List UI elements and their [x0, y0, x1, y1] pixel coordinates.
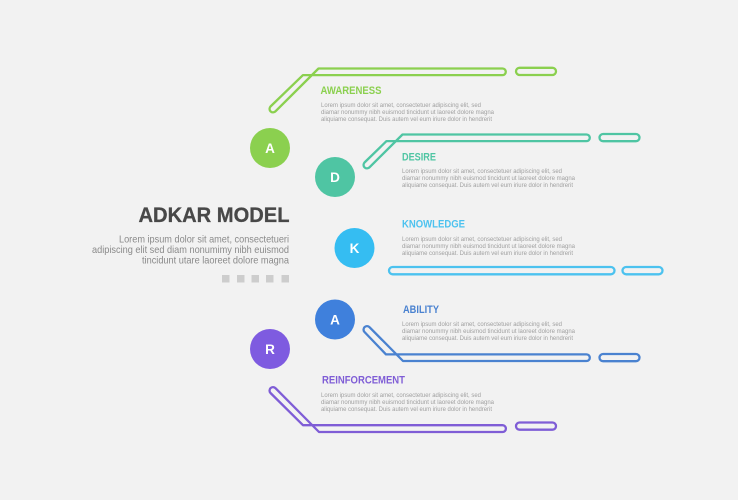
description: diamar nonummy nibh euismod tincidunt ut laoreet dolore magna [321, 399, 494, 406]
step 3: knowledge [334, 218, 662, 274]
description: diamar nonummy nibh euismod tincidunt ut laoreet dolore magna [321, 109, 494, 116]
description [402, 321, 575, 342]
bracket shape [364, 326, 640, 361]
heading: DESIRE [402, 152, 436, 164]
circle badge R [250, 329, 290, 369]
heading: REINFORCEMENT [322, 374, 405, 386]
bracket shape [270, 68, 556, 112]
circle badge D [315, 157, 355, 197]
circle badge A: A [330, 312, 340, 328]
description [402, 168, 575, 189]
step 1: awareness [250, 68, 556, 168]
circle badge D: D [330, 170, 340, 185]
circle badge K [334, 228, 374, 268]
decorative square row [222, 275, 289, 282]
intro text: Lorem ipsum dolor sit amet, consectetueri [119, 234, 289, 246]
description: diamar nonummy nibh euismod tincidunt ut laoreet dolore magna [402, 175, 575, 182]
step 5: reinforcement [250, 329, 556, 432]
step 4: ability [315, 300, 640, 361]
description: Lorem ipsum dolor sit amet, consectetuer adipiscing elit, sed [402, 321, 562, 328]
description: aliquiame consequat. Duis autem vel eum iriure dolor in hendrerit [402, 250, 573, 257]
circle badge K: K [350, 241, 360, 256]
circle badge A [315, 300, 355, 340]
description [321, 102, 494, 123]
title: ADKAR MODEL [138, 204, 290, 227]
heading: AWARENESS [320, 85, 382, 97]
description: aliquiame consequat. Duis autem vel eum iriure dolor in hendrerit [321, 116, 492, 123]
heading: ABILITY [403, 304, 440, 316]
description: Lorem ipsum dolor sit amet, consectetuer adipiscing elit, sed [402, 236, 562, 243]
circle badge A: A [265, 141, 275, 156]
circle badge A [250, 128, 290, 168]
description [402, 236, 575, 257]
bracket shape [389, 267, 662, 274]
bracket shape [364, 134, 640, 168]
description: diamar nonummy nibh euismod tincidunt ut laoreet dolore magna [402, 243, 575, 250]
description: aliquiame consequat. Duis autem vel eum iriure dolor in hendrerit [321, 406, 492, 413]
description: diamar nonummy nibh euismod tincidunt ut laoreet dolore magna [402, 328, 575, 335]
description: Lorem ipsum dolor sit amet, consectetuer adipiscing elit, sed [402, 168, 562, 175]
bracket shape [270, 387, 556, 432]
intro text: tincidunt utare laoreet dolore magna [142, 256, 289, 266]
description: aliquiame consequat. Duis autem vel eum iriure dolor in hendrerit [402, 182, 573, 189]
description [321, 392, 494, 413]
description: Lorem ipsum dolor sit amet, consectetuer adipiscing elit, sed [321, 102, 481, 109]
heading: KNOWLEDGE [402, 218, 465, 230]
circle badge R: R [265, 342, 275, 357]
intro text [92, 234, 289, 266]
step 2: desire [315, 134, 640, 197]
description: aliquiame consequat. Duis autem vel eum iriure dolor in hendrerit [402, 335, 573, 342]
description: Lorem ipsum dolor sit amet, consectetuer adipiscing elit, sed [321, 392, 481, 399]
intro text: adipiscing elit sed diam nonumimy nibh euismod [92, 245, 289, 256]
